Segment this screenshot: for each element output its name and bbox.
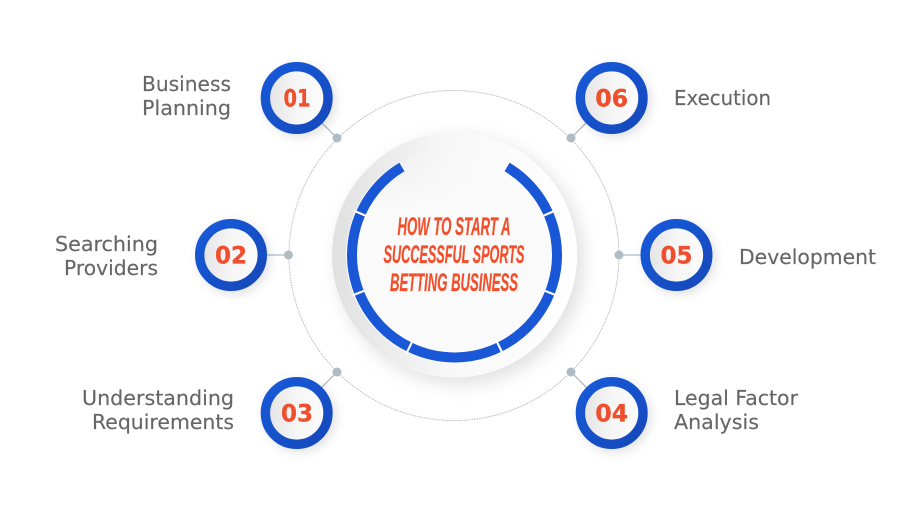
label: Understanding Requirements: Requirements (92, 410, 234, 434)
center title: HOW TO START A (398, 213, 510, 241)
label: Business Planning: Business (142, 72, 231, 96)
label: Business Planning: Planning (142, 96, 231, 120)
label: Searching Providers: Providers (64, 256, 158, 280)
step 01 badge: 01 (284, 84, 310, 112)
step 04 badge: 04 (595, 400, 628, 428)
label: Legal Factor Analysis: Analysis (674, 410, 759, 434)
label: Development: Development (739, 245, 876, 269)
step 04 badge (580, 382, 643, 444)
label: Execution: Execution (674, 86, 771, 110)
label: Business Planning (142, 72, 231, 120)
step 02 badge: 02 (215, 242, 247, 270)
center title (384, 213, 525, 297)
label: Searching Providers (55, 232, 158, 280)
step 05 badge (645, 224, 708, 286)
segmented blue arc (352, 167, 557, 357)
center title: SUCCESSFUL SPORTS (384, 241, 525, 269)
connector lines and nodes (262, 121, 645, 389)
step 06 badge (580, 67, 643, 129)
center title: BETTING BUSINESS (390, 269, 518, 297)
step 03 badge (265, 382, 328, 444)
outer dotted orbit circle (289, 90, 619, 420)
step 01 badge (265, 67, 328, 129)
label: Legal Factor Analysis (674, 386, 799, 434)
step 02 badge (200, 224, 262, 286)
label: Legal Factor Analysis: Legal Factor (674, 386, 799, 410)
step 05 badge: 05 (660, 242, 692, 270)
label: Understanding Requirements: Understanding (82, 386, 234, 410)
step 03 badge: 03 (281, 400, 313, 428)
label: Understanding Requirements (82, 386, 234, 434)
center inner face (346, 146, 563, 364)
label: Searching Providers: Searching (55, 232, 158, 256)
central disc (332, 132, 577, 378)
step 06 badge: 06 (595, 84, 628, 112)
